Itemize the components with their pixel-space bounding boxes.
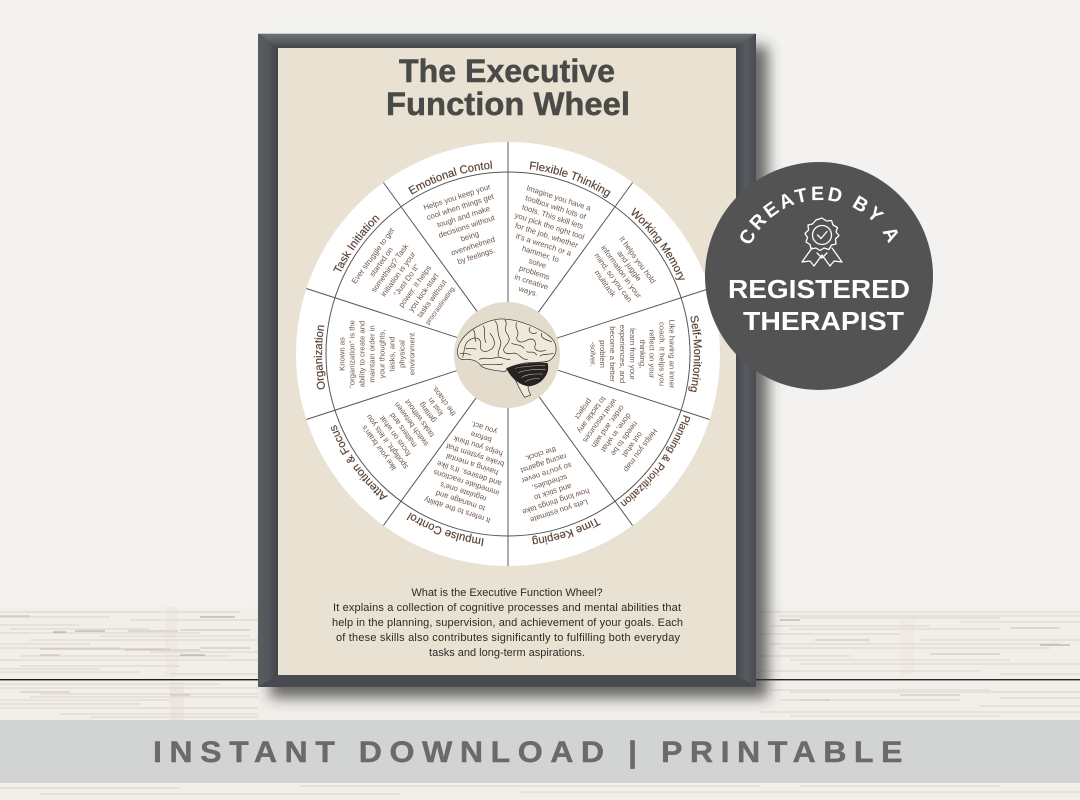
badge main text: REGISTERED bbox=[728, 276, 910, 304]
segment: Time Keeping: and stick to bbox=[533, 482, 573, 502]
segment: Flexible Thinking: it's a wrench or a bbox=[515, 231, 573, 258]
segment: Working Memory: and juggle bbox=[615, 249, 643, 283]
segment: Flexible Thinking: problems bbox=[518, 263, 551, 282]
segment: Impulse Control: helps you think bbox=[452, 434, 504, 458]
segment: Planning and Prioritization: Helps you map bbox=[622, 427, 659, 474]
segment: Emotional Control: decisions without bbox=[437, 213, 497, 240]
segment: Working Memory: information in your bbox=[599, 243, 644, 300]
segment: Planning and Prioritization bbox=[573, 395, 690, 506]
segment: Task Initiation: something? Task bbox=[369, 242, 410, 294]
icon: brain bbox=[458, 319, 556, 397]
segment: Task Initiation: you kick-start bbox=[406, 271, 441, 313]
segment: Attention and Focus: Attention & Focus bbox=[330, 425, 388, 500]
explanatory text bbox=[332, 587, 683, 659]
segment: Flexible Thinking bbox=[513, 162, 611, 299]
segment: Emotional Control: tough and make bbox=[436, 204, 491, 229]
segment: Task Initiation: started on bbox=[368, 245, 395, 278]
title: The Executive bbox=[399, 53, 615, 89]
segment: Time Keeping: Time Keeping bbox=[532, 518, 601, 544]
segment: Organization: your thoughts, bbox=[378, 330, 386, 378]
segment: Time Keeping: schedules, bbox=[531, 472, 569, 492]
segment: Emotional Control: overwhelmed bbox=[450, 235, 496, 257]
segment: Organization: "organization" is the bbox=[348, 320, 356, 388]
segment: Impulse Control: immediate reactions bbox=[432, 468, 500, 497]
segment: Task Initiation: "Just Do It" bbox=[392, 262, 421, 298]
badge arc text: CREATED BY A bbox=[740, 186, 898, 244]
segment: Attention and Focus: focus on what bbox=[377, 413, 413, 458]
segment: Attention and Focus: switch between bbox=[392, 400, 430, 448]
segment: Organization: Known as bbox=[338, 337, 346, 371]
segment: Organization: environment bbox=[408, 332, 416, 375]
segment: Attention and Focus: getting bbox=[417, 400, 438, 424]
segment: Time Keeping: so you're never bbox=[520, 461, 573, 485]
segment: Flexible Thinking: solve bbox=[528, 256, 547, 270]
poster frame bbox=[258, 33, 756, 687]
segment: Task Initiation: initiation is your bbox=[379, 250, 418, 298]
segment: Impulse Control: before bbox=[469, 429, 493, 445]
segment: Emotional Control bbox=[408, 160, 497, 266]
segment: Self-Monitoring: -solver. bbox=[588, 342, 597, 366]
segment: Self-Monitoring: learn from your bbox=[628, 328, 637, 380]
poster paper bbox=[278, 48, 736, 675]
segment: Planning and Prioritization: needs to be bbox=[609, 420, 640, 457]
segment: Planning and Prioritization: order, and with bbox=[590, 404, 626, 450]
badge circle bbox=[705, 162, 933, 390]
inner ring and spokes bbox=[306, 142, 710, 566]
explanatory text: tasks and long-term aspirations. bbox=[429, 647, 585, 659]
segment: Task Initiation: Task Initiation bbox=[333, 216, 380, 272]
segment: Time Keeping: how long things take bbox=[521, 486, 591, 517]
segment: Emotional Control: Helps you keep your bbox=[422, 182, 492, 212]
segment: Impulse Control: brake system that bbox=[444, 441, 505, 469]
segment: Working Memory: Working Memory bbox=[631, 208, 685, 280]
explanatory text: What is the Executive Function Wheel? bbox=[411, 587, 603, 599]
segment: Flexible Thinking: ways. bbox=[517, 284, 539, 299]
segment: Task Initiation bbox=[333, 216, 458, 326]
segment: Attention and Focus bbox=[330, 384, 458, 500]
segment: Organization: tasks, and bbox=[388, 336, 396, 372]
segment: Flexible Thinking: in creative bbox=[513, 272, 549, 292]
segment: Flexible Thinking: hammer, to bbox=[521, 244, 560, 264]
segment: Planning and Prioritization: project bbox=[573, 397, 594, 422]
segment: Time Keeping: racing against bbox=[519, 452, 568, 475]
segment: Working Memory bbox=[592, 208, 685, 304]
segment: Self-Monitoring: Like having an inner bbox=[668, 320, 676, 389]
segment: Impulse Control: and desires. It's like bbox=[436, 459, 503, 488]
wall background bbox=[0, 0, 1080, 607]
explanatory text: help in the planning, supervision, and achievement of your goals. Each bbox=[332, 617, 683, 629]
segment: Self-Monitoring bbox=[588, 316, 702, 392]
segment: Flexible Thinking: tools. This skill lets bbox=[521, 203, 585, 231]
segment: Self-Monitoring: coach. It helps you bbox=[658, 322, 667, 386]
segment: Flexible Thinking: for the job, whether bbox=[514, 221, 580, 250]
segment: Organization bbox=[314, 320, 416, 390]
segment: Impulse Control: Impulse Control bbox=[406, 512, 484, 546]
banner text: INSTANT DOWNLOAD | PRINTABLE bbox=[153, 736, 910, 769]
segment: Working Memory: multitask bbox=[593, 269, 618, 299]
segment: Task Initiation: power. It helps bbox=[397, 264, 433, 309]
segment: Self-Monitoring: problem bbox=[598, 340, 607, 368]
segment: Impulse Control: having a mental bbox=[445, 452, 499, 477]
segment: Working Memory: It helps you hold bbox=[617, 235, 658, 285]
segment: Impulse Control: It refers to the ability bbox=[423, 495, 492, 525]
segment: Emotional Control: being bbox=[459, 229, 480, 243]
segment: Organization: maintain order in bbox=[368, 325, 376, 383]
segment: Time Keeping: the clock. bbox=[524, 445, 557, 463]
segment: Emotional Control: Emotional Contol bbox=[408, 160, 492, 195]
segment: Impulse Control bbox=[406, 419, 505, 546]
segment: Attention and Focus: matters and bbox=[388, 411, 419, 449]
segment: Task Initiation: Ever struggle to get bbox=[350, 226, 397, 285]
badge main text: THERAPIST bbox=[743, 308, 904, 336]
icon: award rosette bbox=[802, 218, 842, 266]
title: Function Wheel bbox=[386, 86, 630, 122]
segment: Emotional Control: cool when things get bbox=[425, 191, 496, 222]
segment: Self-Monitoring: experiences, and bbox=[618, 325, 627, 383]
segment: Attention and Focus: the chaos. bbox=[430, 384, 458, 418]
segment: Self-Monitoring: reflect on your bbox=[648, 330, 657, 379]
segment: Self-Monitoring: thinking, bbox=[638, 340, 647, 368]
segment: Planning and Prioritization: to tackle any bbox=[575, 395, 608, 435]
segment: Organization: Organization bbox=[314, 325, 326, 390]
segment: Emotional Control: by feelings. bbox=[456, 246, 496, 266]
wheel disc bbox=[296, 142, 720, 566]
segment: Organization: ability to create and bbox=[358, 321, 366, 387]
badge main text bbox=[728, 276, 910, 336]
segment: Impulse Control: to manage and bbox=[435, 489, 486, 513]
segment: Flexible Thinking: you pick the right tool bbox=[514, 210, 586, 242]
segment: Organization: physical bbox=[398, 340, 406, 368]
segment: Impulse Control: regulate one's bbox=[439, 480, 487, 503]
segment: Attention and Focus: like your brain's bbox=[360, 423, 398, 472]
segment: Planning and Prioritization: what resources bbox=[581, 396, 619, 445]
explanatory text: It explains a collection of cognitive processes and mental abilities that bbox=[333, 602, 681, 614]
explanatory text: of these skills also contributes significantly to fulfilling both everyday bbox=[336, 632, 680, 644]
segment: Flexible Thinking: Flexible Thinking bbox=[530, 162, 611, 198]
centre hub bbox=[454, 302, 560, 408]
segment: Self-Monitoring: become a better bbox=[608, 326, 617, 382]
segment: Task Initiation: tasks without bbox=[415, 277, 449, 319]
segment: Planning and Prioritization: done, in what bbox=[599, 411, 633, 454]
segment: Task Initiation: procrastinating. bbox=[425, 284, 458, 326]
segment: Attention and Focus: lost in bbox=[426, 396, 445, 417]
segment: Working Memory: mind, so you can bbox=[592, 251, 634, 304]
executive function wheel bbox=[296, 142, 720, 566]
segment: Attention and Focus: tasks without bbox=[402, 397, 436, 439]
segment: Attention and Focus: spotlight, it lets you bbox=[364, 413, 410, 471]
segment: Flexible Thinking: Imagine you have a bbox=[525, 183, 593, 213]
segment: Impulse Control: you act. bbox=[470, 419, 498, 436]
segment: Self-Monitoring: Self-Monitoring bbox=[688, 316, 702, 392]
badge: created by a registered therapist bbox=[705, 162, 933, 390]
segment: Planning and Prioritization: Planning & Prioritization bbox=[620, 415, 690, 506]
segment: Planning and Prioritization: out what bbox=[620, 430, 645, 460]
segment: Time Keeping: Lets you estimate bbox=[529, 497, 589, 525]
frame shadow bbox=[270, 46, 768, 698]
wooden tabletop bbox=[0, 607, 1080, 800]
segment: Time Keeping bbox=[519, 445, 601, 544]
title bbox=[386, 53, 630, 122]
segment: Flexible Thinking: toolbox with lots of bbox=[524, 193, 588, 222]
bottom banner bbox=[0, 720, 1080, 783]
